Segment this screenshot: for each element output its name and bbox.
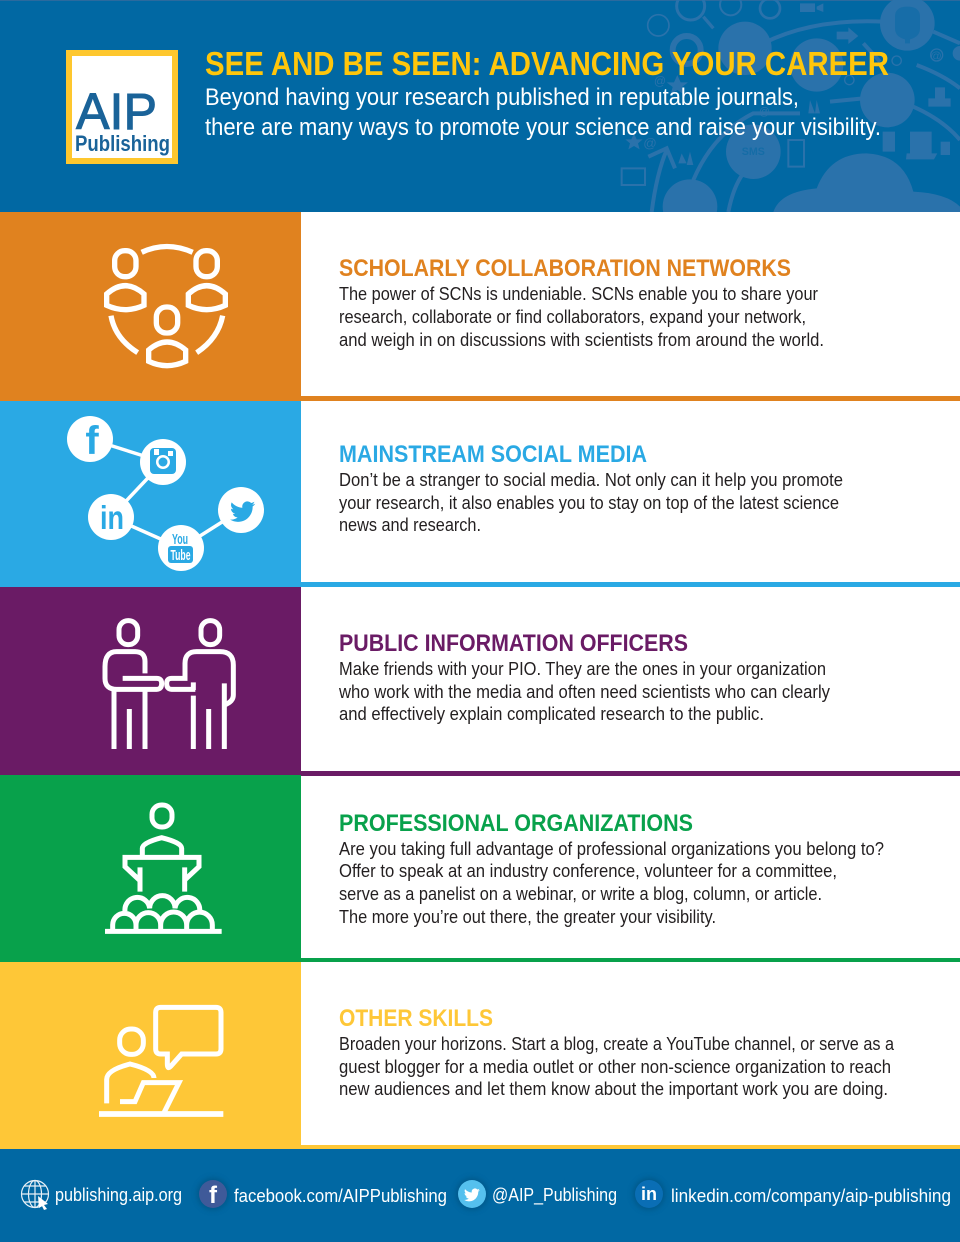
body text: and effectively explain complicated research to the public. (339, 704, 764, 724)
icon: social network: f (85, 419, 99, 463)
icon: speaker at podium (105, 805, 222, 931)
header background pattern: SMS (742, 146, 765, 158)
header background pattern: @ (759, 106, 770, 118)
icon: person at laptop with speech bubble (99, 1007, 223, 1114)
header background pattern (622, 0, 960, 234)
twitter link (456, 1178, 617, 1210)
subtitle: there are many ways to promote your science and raise your visibility. (205, 114, 881, 141)
heading: MAINSTREAM SOCIAL MEDIA (339, 441, 647, 468)
body text: Offer to speak at an industry conference, volunteer for a committee, (339, 861, 837, 881)
body text (339, 1034, 895, 1099)
facebook link: facebook.com/AIPPublishing (234, 1186, 447, 1206)
body text: serve as a panelist on a webinar, or write a blog, column, or article. (339, 884, 822, 904)
heading: OTHER SKILLS (339, 1005, 493, 1032)
heading: PUBLIC INFORMATION OFFICERS (339, 630, 688, 657)
logo: AIP (76, 83, 157, 140)
header background pattern: @ (654, 74, 666, 88)
panel: public information officers (0, 587, 960, 776)
panel: mainstream social media (0, 401, 960, 587)
panel: scholarly collaboration networks (0, 212, 960, 401)
header background pattern: @ (930, 50, 942, 62)
body text: and weigh in on discussions with scientists from around the world. (339, 330, 824, 350)
panel: footer (0, 1149, 960, 1242)
body text: your research, it also enables you to stay on top of the latest science (339, 493, 839, 513)
body text: The power of SCNs is undeniable. SCNs enable you to share your (339, 284, 818, 304)
logo: Publishing (75, 131, 170, 156)
subtitle (205, 84, 881, 141)
body text: guest blogger for a media outlet or other non-science organization to reach (339, 1057, 891, 1077)
body text: who work with the media and often need scientists who can clearly (338, 682, 830, 702)
body text (339, 839, 884, 927)
icon: social network: in (100, 499, 124, 536)
body text: news and research. (339, 515, 481, 535)
facebook link (197, 1178, 447, 1210)
twitter link: @AIP_Publishing (492, 1185, 617, 1206)
body text: research, collaborate or find collaborators, expand your network, (339, 307, 806, 327)
body text (338, 659, 830, 724)
icon: social network: You (172, 531, 188, 548)
heading: PROFESSIONAL ORGANIZATIONS (339, 810, 693, 837)
body text: Broaden your horizons. Start a blog, create a YouTube channel, or serve as a (339, 1034, 895, 1054)
body text (339, 284, 824, 350)
panel: header (0, 0, 960, 234)
body text: The more you’re out there, the greater your visibility. (339, 907, 716, 927)
body text (339, 470, 843, 535)
body text: Are you taking full advantage of professional organizations you belong to? (339, 839, 884, 859)
website link (22, 1180, 182, 1210)
website link: publishing.aip.org (55, 1185, 182, 1205)
panel: professional organizations (0, 775, 960, 962)
icon: social network (67, 416, 264, 571)
body text: Don’t be a stranger to social media. Not only can it help you promote (339, 470, 843, 490)
logo (66, 50, 178, 164)
header background pattern: @ (643, 135, 657, 150)
icon: collaboration network (107, 246, 225, 366)
linkedin link: linkedin.com/company/aip-publishing (671, 1186, 951, 1206)
subtitle: Beyond having your research published in reputable journals, (205, 84, 799, 111)
body text: Make friends with your PIO. They are the ones in your organization (339, 659, 826, 679)
title: SEE AND BE SEEN: ADVANCING YOUR CAREER (205, 45, 889, 82)
body text: new audiences and let them know about the important work you are doing. (339, 1079, 888, 1099)
linkedin link (633, 1178, 951, 1210)
facebook link: f (209, 1182, 218, 1209)
heading: SCHOLARLY COLLABORATION NETWORKS (339, 255, 791, 282)
icon: social network: Tube (170, 547, 190, 564)
linkedin link: in (641, 1184, 657, 1204)
panel: other skills (0, 962, 960, 1149)
icon: two people shaking hands (105, 621, 233, 749)
